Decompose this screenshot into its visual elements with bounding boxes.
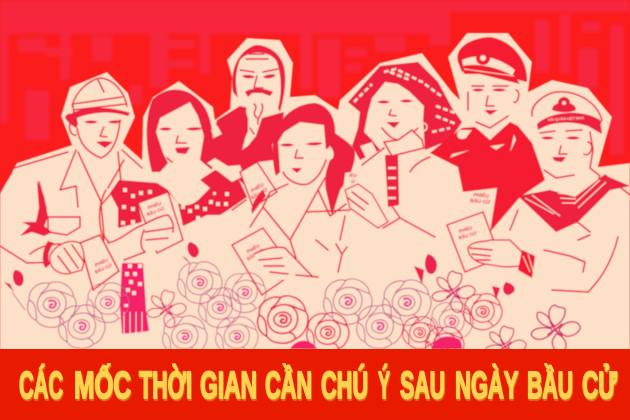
collar — [384, 130, 424, 156]
worker collar and shirt lines — [0, 150, 142, 208]
sailor collar stripes — [518, 175, 630, 232]
old man ballot card: BẦU CỬ — [250, 186, 269, 200]
old man face — [240, 54, 278, 97]
worker helmet — [72, 78, 130, 119]
sailor body lines — [510, 175, 630, 292]
ballot and hand: Ử — [351, 178, 355, 184]
title text: NGÀY — [455, 363, 518, 407]
flower buds — [4, 242, 515, 300]
hair — [147, 90, 213, 172]
face — [375, 82, 424, 140]
small plum blossom — [147, 290, 186, 328]
title text: Ý — [378, 363, 390, 407]
worker pocket with red splash — [20, 181, 80, 236]
ballot card: PHIẾU — [147, 200, 163, 210]
title text: BẦU — [527, 363, 573, 407]
figure: ethnic woman with headdress — [342, 62, 462, 237]
ballot card: BẦU CỬ — [246, 247, 265, 261]
rose bouquet — [4, 242, 580, 365]
sailor cap — [532, 92, 602, 134]
body lines — [362, 148, 435, 237]
worker ballot card: PHIẾU — [94, 256, 109, 268]
title text: MỐC — [74, 362, 131, 407]
figure: woman with checkered scarf — [100, 90, 247, 334]
figure: central woman — [232, 103, 355, 295]
worker face — [69, 120, 122, 158]
figure: old man with beard — [207, 45, 285, 207]
officer ballot card: BẦU CỬ — [470, 197, 491, 206]
sailor face — [536, 128, 600, 186]
checkered scarf — [120, 263, 149, 334]
officer ballot card: PHIẾU — [473, 191, 489, 200]
ballot and hand — [342, 170, 388, 228]
lower ballot and hand — [447, 212, 535, 278]
ballot and hand: IẾU — [349, 172, 358, 178]
officer neck and face — [467, 84, 520, 132]
title text: CẦN — [265, 363, 312, 407]
collar and body lines — [232, 178, 350, 258]
old man torso — [207, 106, 284, 188]
title text: CÁC — [19, 363, 63, 407]
dotted dress — [110, 160, 247, 228]
title text: CHÚ — [321, 363, 368, 407]
cream paper-cut silhouette — [0, 33, 630, 352]
ballot card — [108, 192, 183, 260]
figure: worker — [0, 78, 142, 290]
ballot card: PHIẾU — [245, 242, 261, 254]
title text: GIAN — [200, 365, 257, 407]
old man hair — [232, 45, 285, 112]
ballot card: BẦU CỬ — [146, 205, 165, 217]
ballot card — [232, 228, 312, 295]
old man beard — [242, 96, 270, 150]
title text: SAU — [400, 365, 445, 407]
title text: THỜI — [139, 363, 192, 407]
sailor cap: HẢI QUÂN VIỆT NAM — [548, 115, 584, 122]
figure: navy sailor — [510, 92, 630, 292]
officer shirt — [430, 122, 545, 232]
headdress — [348, 62, 462, 160]
title banner — [0, 349, 630, 420]
officer cap — [457, 37, 527, 84]
figure: army officer — [430, 37, 545, 278]
worker ballot card: BẦU CỬ — [94, 262, 113, 275]
officer ballot card — [463, 188, 497, 232]
arm outline — [100, 160, 124, 240]
worker sleeve arm — [0, 244, 62, 263]
old man ballot card: PHIẾU — [249, 181, 265, 193]
face — [280, 142, 326, 184]
face — [159, 127, 203, 167]
lower ballot and hand: BẦU CỬ — [458, 230, 477, 240]
old man ballot card — [240, 162, 277, 207]
red embroidered panel — [385, 155, 399, 207]
hair — [273, 103, 355, 216]
lower ballot and hand: PHIẾU — [458, 224, 474, 234]
worker ballot card — [50, 235, 119, 290]
worker hair and ear — [65, 114, 78, 128]
